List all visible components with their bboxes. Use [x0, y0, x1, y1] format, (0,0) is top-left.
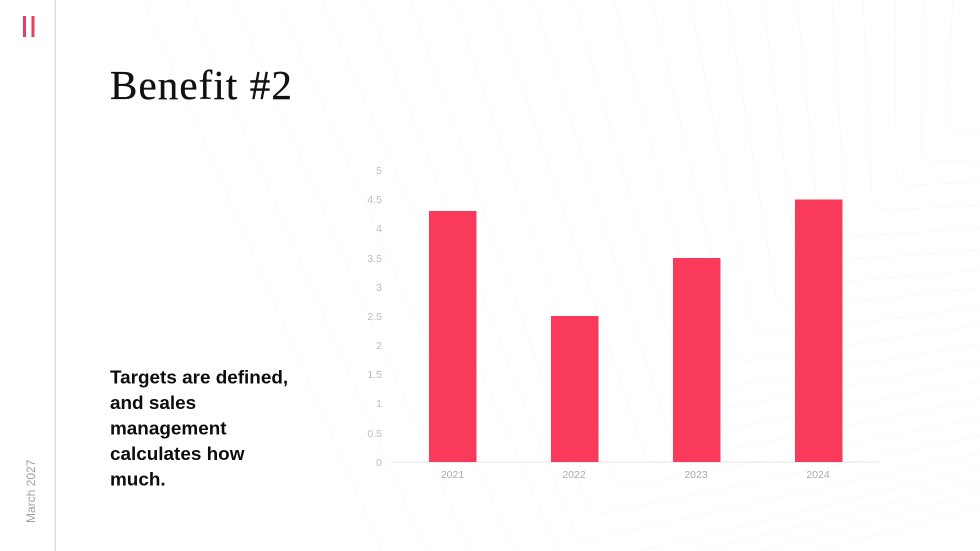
- x axis labels: 2022: [562, 469, 586, 481]
- text block: description: and sales: [110, 393, 196, 414]
- x axis labels: 2024: [806, 469, 830, 481]
- y axis labels: 2: [376, 340, 382, 352]
- y axis labels: 1.5: [367, 369, 382, 381]
- y axis labels: 1: [376, 398, 382, 410]
- y axis labels: 5: [376, 165, 382, 177]
- icon: pause-style red marks: [23, 16, 34, 37]
- y axis labels: 2.5: [367, 311, 382, 323]
- x axis labels: 2023: [684, 469, 708, 481]
- bars: [429, 200, 842, 462]
- date label: March 2027: [24, 459, 38, 523]
- title: Benefit #2: [110, 62, 293, 108]
- y axis labels: 4: [376, 223, 382, 235]
- y axis labels: 0.5: [367, 428, 382, 440]
- y axis labels: 0: [376, 457, 382, 469]
- text block: description: Targets are defined,: [110, 368, 288, 388]
- x axis labels: 2021: [441, 469, 464, 481]
- y axis labels: 3: [376, 282, 382, 294]
- y axis labels: 3.5: [367, 253, 382, 265]
- text block: description: much.: [110, 470, 166, 490]
- sidebar divider: [54, 0, 56, 551]
- x axis labels: [441, 469, 830, 481]
- y axis labels: 4.5: [367, 194, 382, 206]
- x axis line: [392, 462, 880, 463]
- bar chart: [367, 165, 880, 481]
- text block: description: calculates how: [110, 444, 245, 465]
- y axis labels: [367, 165, 382, 469]
- text block: description: [110, 368, 288, 490]
- text block: description: management: [110, 418, 227, 440]
